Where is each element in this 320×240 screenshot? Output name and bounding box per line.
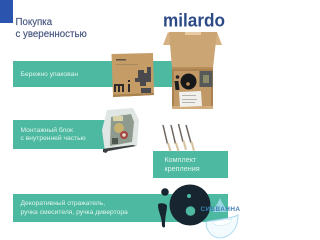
title: Покупка: [16, 17, 52, 28]
watermark: [200, 198, 240, 238]
panel: carefully packed: [13, 61, 172, 87]
label: mounting block: с внутренней частью: [20, 135, 86, 142]
label: mounting block: [20, 127, 86, 142]
label: decorative parts: [20, 200, 128, 216]
icon: cover plate: [170, 184, 210, 226]
icon: anchors and screws: [163, 124, 195, 152]
label: fixing kit: Комплект: [164, 155, 196, 164]
label: decorative parts: ручка смесителя, ручка дивертора: [20, 208, 128, 216]
label: carefully packed: Бережно упакован: [20, 71, 78, 78]
panel: mounting block: [13, 120, 106, 149]
panel: fixing kit: [153, 151, 228, 178]
icon: mounting block: [102, 108, 139, 153]
icon: diverter knob: [161, 188, 169, 196]
illustrations: [102, 10, 240, 238]
panel: decorative parts: [13, 194, 228, 222]
title: [16, 17, 87, 40]
title: с уверенностью: [16, 29, 87, 40]
icon: open box: [163, 32, 222, 109]
icon: mixer handle: [158, 203, 167, 228]
label: mounting block: Монтажный блок: [20, 127, 73, 134]
label: fixing kit: [164, 155, 200, 172]
watermark: СИБВАННА: [200, 206, 240, 213]
label: decorative parts: Декоративный отражатель,: [20, 200, 105, 206]
label: fixing kit: крепления: [164, 164, 200, 172]
blue corner block: [0, 0, 13, 23]
brand logo: milardo: [163, 10, 225, 30]
icon: closed box: [112, 53, 154, 97]
